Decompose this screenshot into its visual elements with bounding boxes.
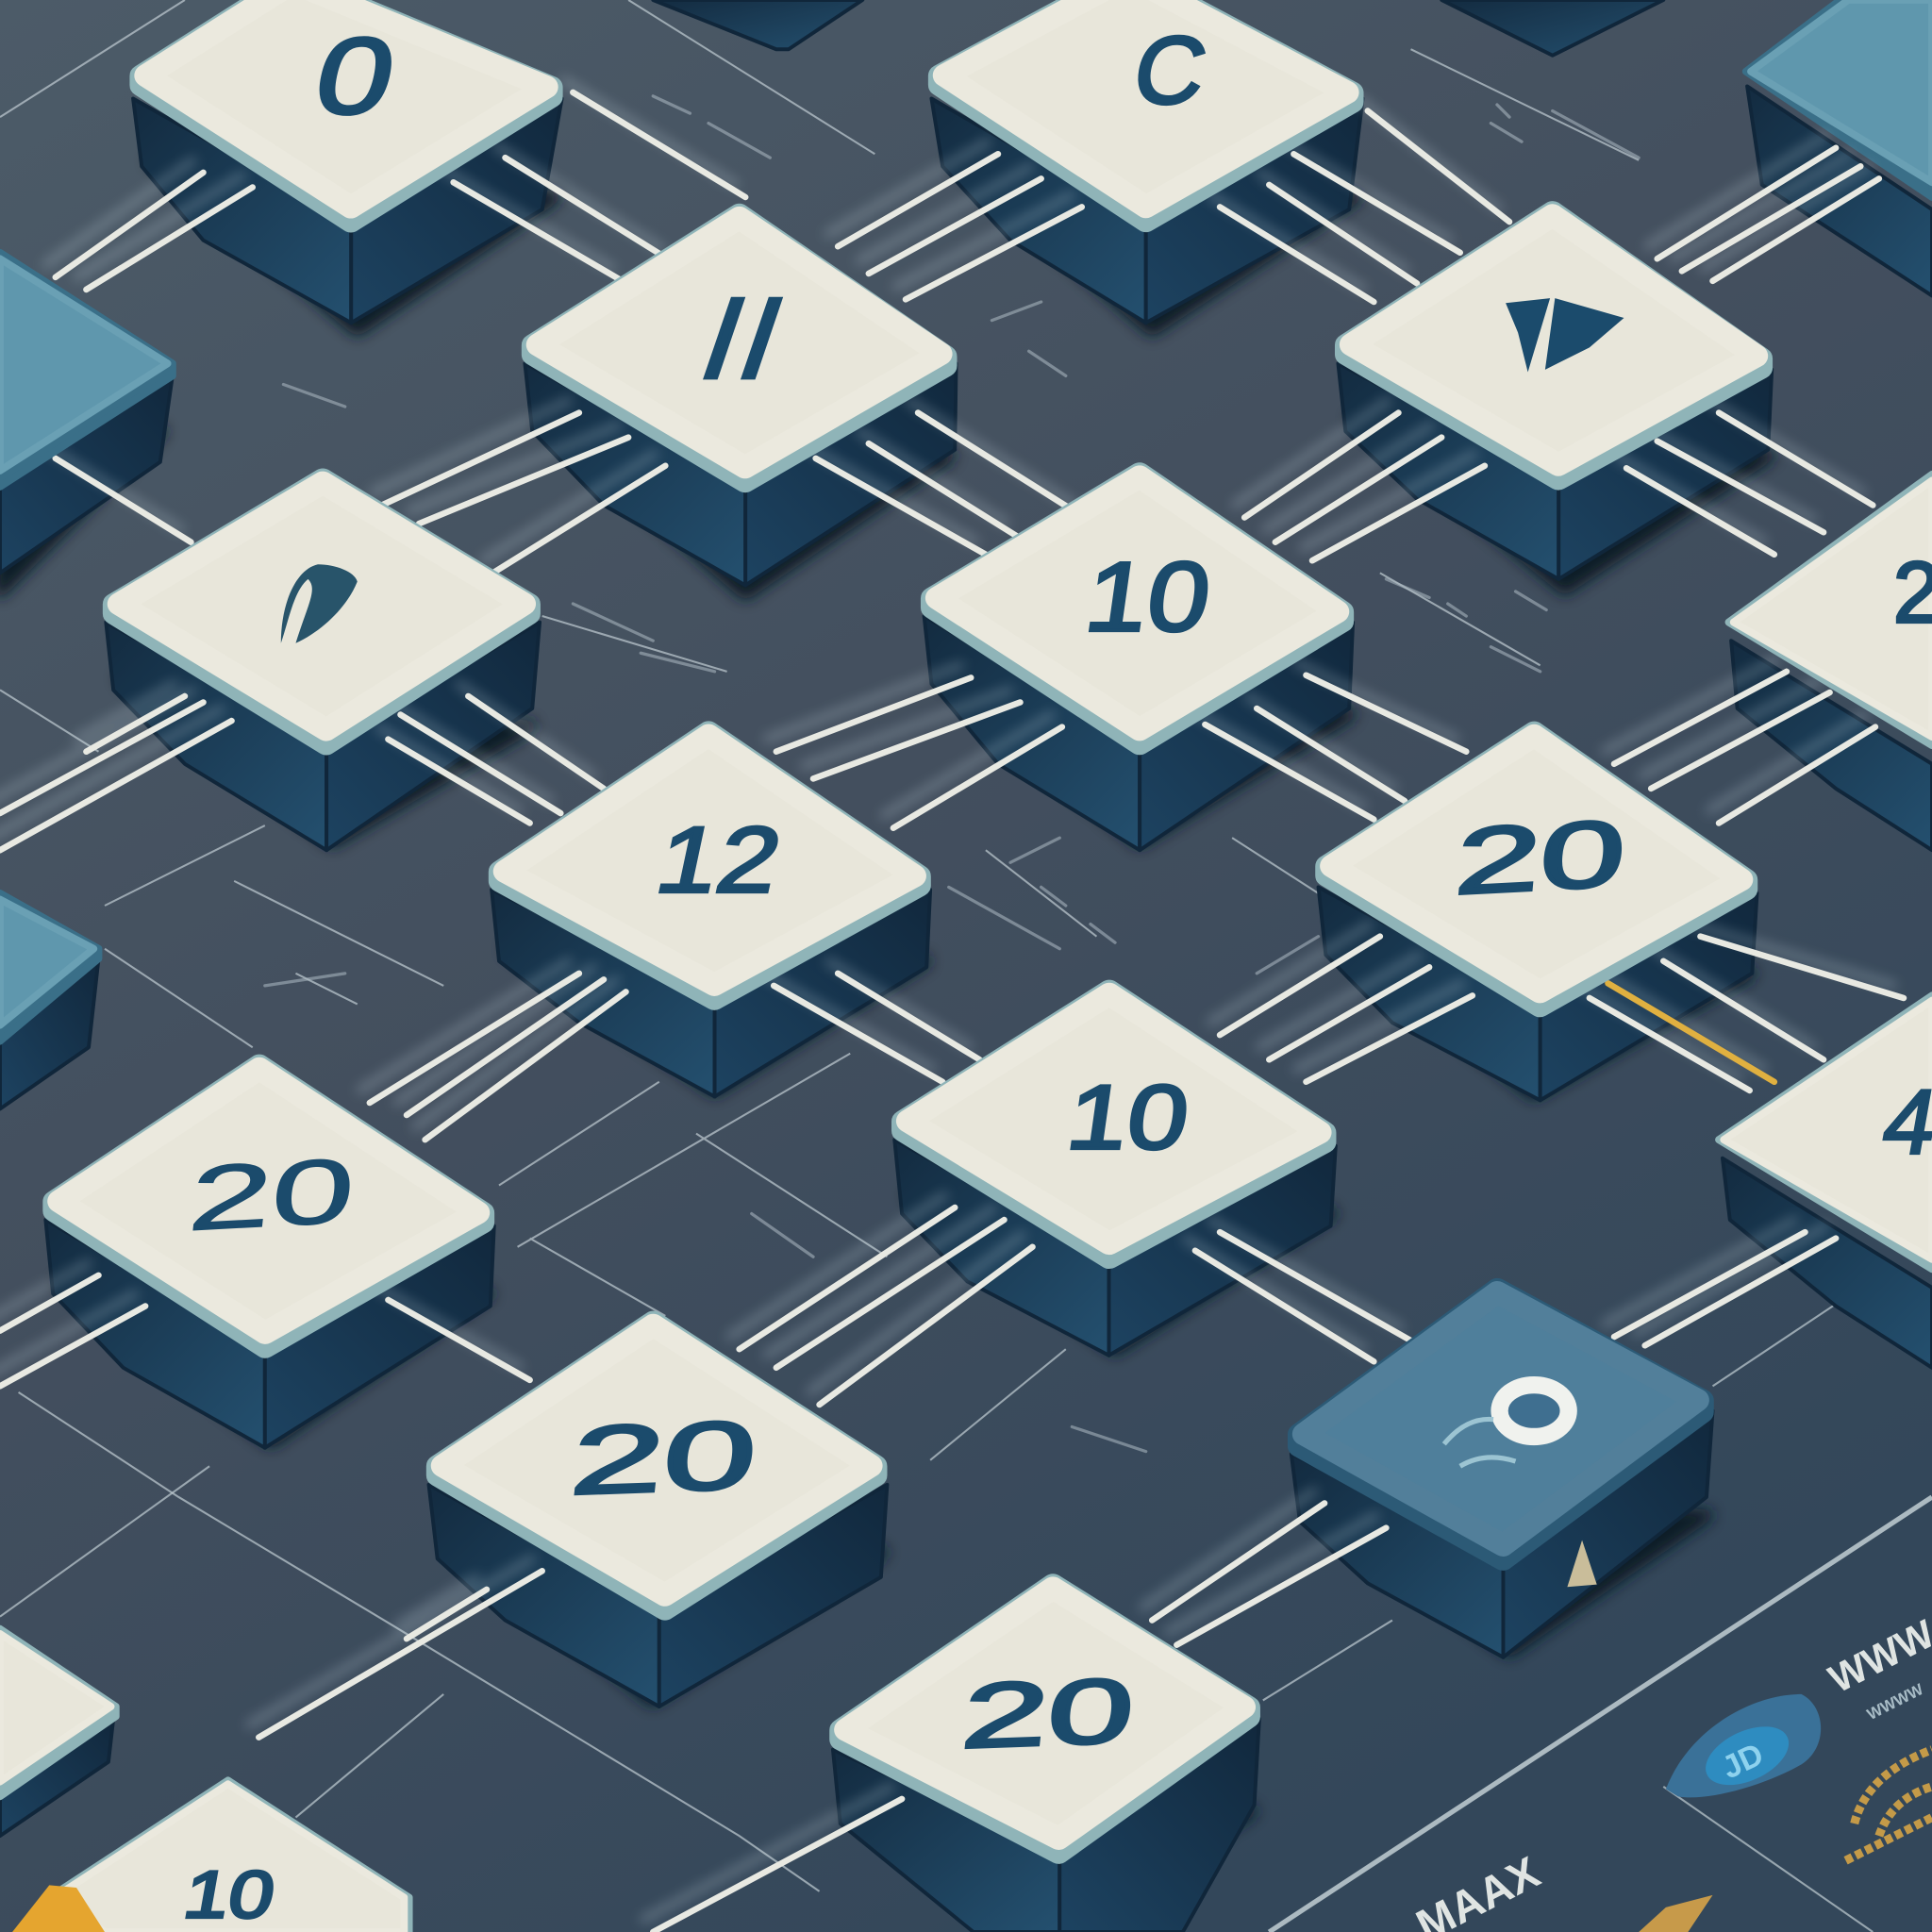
icon: leaf glyph — [281, 564, 358, 643]
wires — [56, 92, 745, 290]
wire — [653, 1799, 902, 1932]
key: number 10 lower — [740, 991, 1411, 1405]
key: number 20 — [1220, 733, 1904, 1100]
wires — [1152, 1503, 1386, 1645]
wires — [1220, 937, 1904, 1091]
digit: C — [1126, 16, 1214, 125]
scratch marks — [265, 96, 1639, 1452]
icon: blue leaf badge — [1666, 1694, 1821, 1797]
digit: 10 — [1079, 541, 1217, 652]
key: number 0 — [56, 0, 745, 330]
digit: 0 — [305, 15, 406, 137]
key: left blue lower partial — [0, 893, 98, 1109]
wires — [1614, 672, 1875, 823]
icon: gold bottom triangle — [1639, 1895, 1713, 1932]
digit: 20 — [184, 1139, 359, 1250]
wires — [1614, 1232, 1836, 1345]
key: number 20 bottom — [653, 1585, 1259, 1932]
key: top right wires — [1657, 148, 1879, 281]
icon: blue leaf badge: JD — [1717, 1737, 1769, 1786]
icon: gold arc chart — [1846, 1750, 1932, 1860]
wires — [838, 111, 1509, 302]
key: number 20 left — [0, 1066, 530, 1448]
key: number 20 centre — [258, 1323, 887, 1738]
icon: ring — [1500, 1385, 1569, 1437]
digit: 10 — [178, 1857, 280, 1932]
wires — [776, 675, 1466, 828]
digit: 20 — [566, 1401, 761, 1515]
digit: 20 — [958, 1659, 1139, 1768]
key: left blue partial — [0, 253, 191, 591]
key: leaf glyph — [0, 479, 604, 850]
key: glyph C — [838, 0, 1509, 330]
key: blue icon key — [1152, 1290, 1713, 1657]
icon: garbled glyph — [1506, 298, 1624, 372]
key: glyph double slash — [382, 215, 1084, 594]
wires — [382, 413, 1084, 573]
key: partial top dark keys — [653, 0, 1663, 56]
digit: 20 — [1452, 801, 1629, 914]
digit: 10 — [1061, 1067, 1195, 1168]
key: number 12 — [370, 732, 979, 1140]
wires — [1244, 413, 1873, 560]
label: small caption fragment: WWWW — [1864, 1680, 1926, 1724]
key: bottom left white partial — [0, 1629, 116, 1836]
key: number 2 partial — [1614, 475, 1932, 850]
wires — [0, 696, 604, 850]
wire — [56, 458, 191, 542]
wires — [740, 1208, 1411, 1405]
digit: // — [706, 278, 781, 400]
key: abstract glyph — [1244, 212, 1873, 589]
wire — [258, 1571, 542, 1738]
digit: 12 — [648, 808, 791, 912]
key: number 4 partial — [1614, 995, 1932, 1368]
icon: orange tab — [12, 1885, 105, 1932]
key: top right blue partial — [1746, 0, 1932, 295]
wires — [0, 1275, 530, 1386]
key: number 10 bottom left — [49, 1780, 409, 1932]
key: number 10 — [776, 474, 1466, 850]
wires — [370, 974, 979, 1140]
